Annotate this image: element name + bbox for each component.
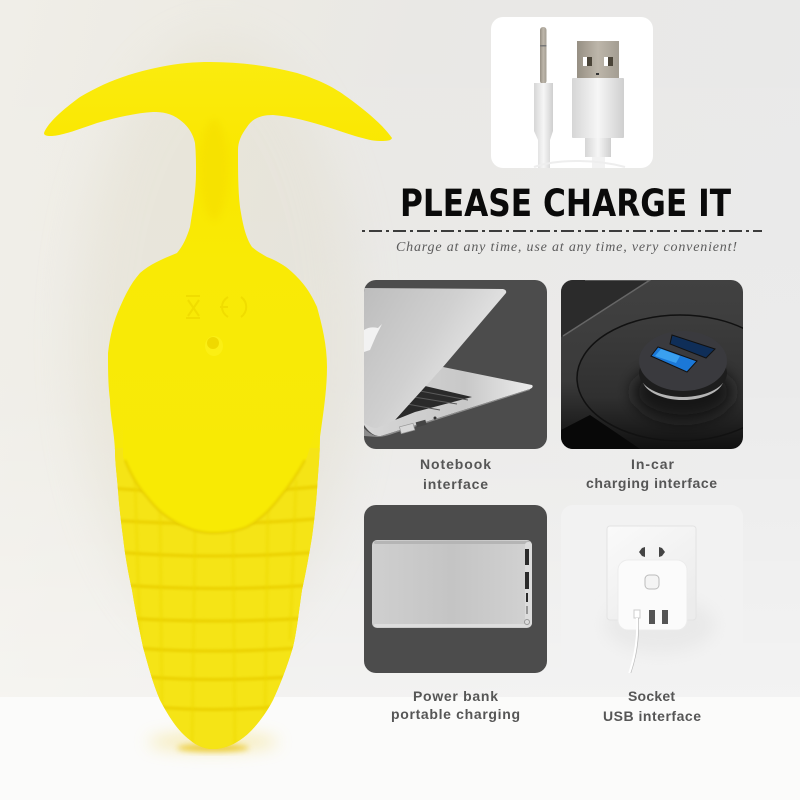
- label: power bank: [391, 688, 520, 722]
- stem shading: [200, 120, 228, 220]
- panel: power bank: [364, 505, 547, 673]
- panel: wall socket USB: [606, 526, 696, 673]
- icon: DC jack plug: [534, 27, 553, 168]
- card: charging cable: [491, 17, 653, 169]
- label: power bank: portable charging: [391, 706, 520, 722]
- label: notebook: interface: [423, 476, 488, 492]
- panel: notebook interface: [364, 280, 547, 449]
- product: yellow corn-shaped silicone toy: [44, 62, 392, 749]
- CE and recycling marks: [186, 296, 246, 318]
- label: notebook: [420, 456, 491, 492]
- laptop lid: [364, 288, 506, 428]
- subtitle: Charge at any time, use at any time, very convenient!: [396, 240, 737, 255]
- laptop base: [364, 367, 533, 436]
- corn section: [114, 448, 320, 749]
- label: in-car: In-car: [631, 456, 675, 472]
- label: in-car: [586, 456, 717, 491]
- label: notebook: Notebook: [420, 456, 491, 472]
- label: socket: Socket: [628, 688, 675, 704]
- husk leaf: [123, 448, 310, 533]
- dash-dot divider: [362, 230, 762, 232]
- panel: in-car charging: [561, 280, 743, 449]
- label: power bank: Power bank: [413, 688, 498, 704]
- car charger: [639, 331, 727, 400]
- label: socket: USB interface: [603, 708, 701, 724]
- logo: [364, 324, 382, 352]
- label: in-car: charging interface: [586, 475, 717, 491]
- power button dimple: [205, 336, 223, 356]
- icon: USB plug: [572, 41, 624, 169]
- title: PLEASE CHARGE IT: [400, 182, 732, 225]
- label: socket: [603, 688, 701, 724]
- ports: [416, 420, 427, 427]
- keyboard: [395, 386, 472, 420]
